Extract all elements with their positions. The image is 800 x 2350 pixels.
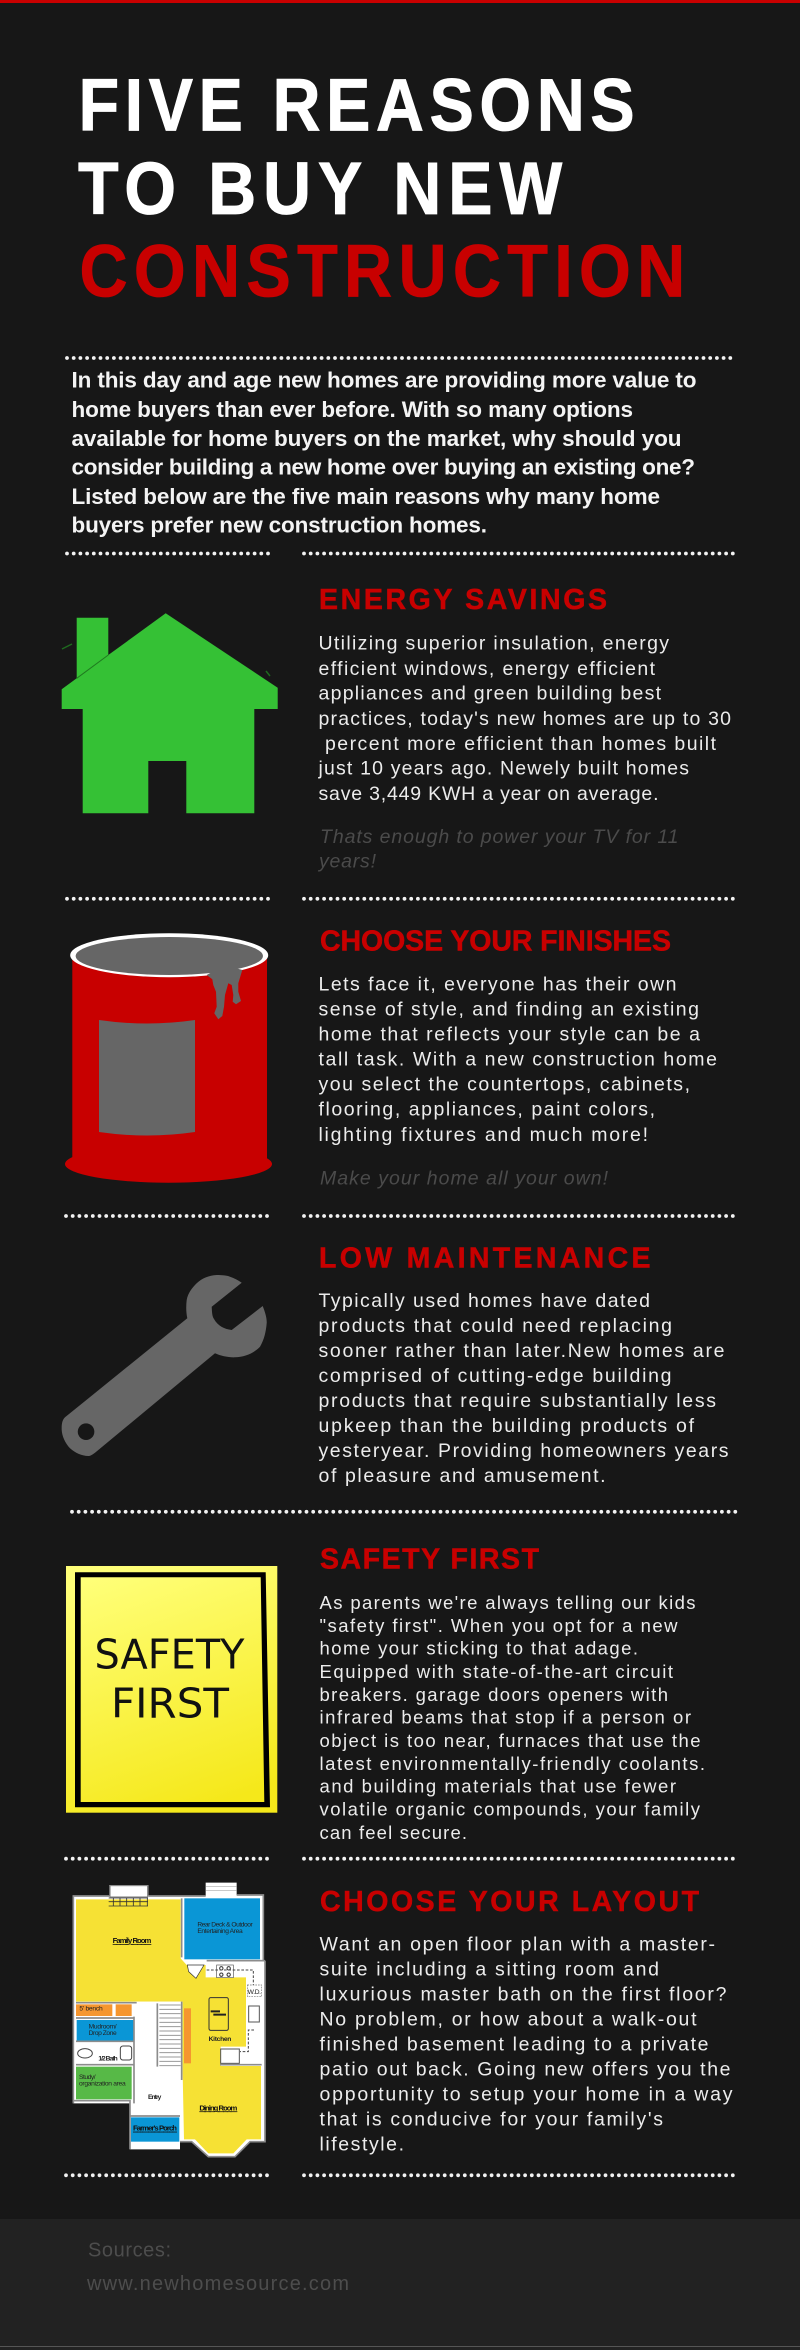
text: finishes body: home that reflects your style can be a (318, 1024, 700, 1046)
bath fixtures (78, 2049, 92, 2058)
panel: safety first (66, 1544, 705, 1843)
callout: make it your own: Make your home all your own! (320, 1168, 609, 1190)
text: safety body: object is too near, furnaces that use the (320, 1730, 700, 1751)
title (78, 63, 685, 312)
text: layout body: luxurious master bath on the first floor? (320, 1984, 727, 2006)
icon: floor plan (73, 1883, 265, 2157)
text: finishes body: sense of style, and finding an existing (318, 998, 699, 1020)
text: energy savings body: practices, today's new homes are up to 30 (318, 708, 731, 730)
text: layout body: patio out back. Going new offers you the (320, 2059, 730, 2081)
walls (73, 1895, 265, 2157)
icon: wrench (62, 1275, 267, 1456)
text: layout body: finished basement leading to a private (320, 2034, 708, 2056)
text: sources (86, 2240, 349, 2295)
icon: safety sign: FIRST (111, 1679, 230, 1727)
room labels: organization area (79, 2081, 126, 2088)
text: finishes body: flooring, appliances, paint colors, (318, 1099, 655, 1121)
room labels: 5' bench (79, 2005, 103, 2012)
text: maintenance body: upkeep than the building products of (318, 1415, 695, 1437)
text: energy savings body: percent more efficient than homes built (325, 733, 717, 755)
intro text: home buyers than ever before. With so many options (72, 397, 633, 422)
text: energy savings body (318, 633, 731, 805)
text: finishes body: tall task. With a new construction home (318, 1048, 717, 1070)
text: finishes body: Lets face it, everyone has their own (318, 974, 676, 996)
text: safety body: volatile organic compounds, your family (320, 1798, 701, 1820)
heading: low maintenance: LOW MAINTENANCE (319, 1242, 650, 1274)
intro text (72, 368, 696, 538)
text: maintenance body: of pleasure and amusement. (318, 1465, 606, 1487)
callout: TV fact: years! (317, 851, 377, 873)
callout: TV fact: Thats enough to power your TV for 11 (320, 826, 678, 848)
title: FIVE REASONS (78, 63, 635, 146)
panel: sources footer (0, 2219, 800, 2350)
icon: safety sign: SAFETY (94, 1630, 245, 1678)
text: safety body (320, 1592, 705, 1843)
panel: energy savings (62, 584, 731, 873)
text: maintenance body: products that could need replacing (318, 1315, 672, 1337)
callout: TV fact (317, 826, 678, 873)
heading: choose your layout: CHOOSE YOUR LAYOUT (320, 1886, 700, 1918)
text: safety body: Equipped with state-of-the-art circuit (320, 1661, 673, 1682)
text: safety body: breakers. garage doors openers with (320, 1684, 668, 1705)
text: finishes body: lighting fixtures and much more! (318, 1124, 648, 1146)
title: CONSTRUCTION (80, 229, 685, 312)
heading: safety first: SAFETY FIRST (320, 1544, 540, 1576)
text: safety body: infrared beams that stop if a person or (320, 1707, 691, 1728)
text: safety body: and building materials that use fewer (320, 1776, 676, 1797)
room labels: Entertaining Area (197, 1928, 243, 1935)
intro text: consider building a new home over buying an existing one? (72, 455, 695, 480)
room labels: Family Room (113, 1936, 152, 1945)
intro text: buyers prefer new construction homes. (72, 513, 487, 538)
stairs (159, 2005, 181, 2066)
room labels: Entry (148, 2094, 162, 2101)
room labels: Farmer's Porch (133, 2124, 177, 2133)
deck steps (206, 1887, 237, 1891)
panel: choose your layout (73, 1883, 733, 2157)
intro text: In this day and age new homes are providing more value to (72, 368, 696, 393)
room labels: Study/ (79, 2074, 96, 2081)
text: sources: Sources: (88, 2240, 171, 2262)
text: maintenance body: products that require substantially less (318, 1390, 716, 1412)
room labels: Rear Deck & Outdoor (197, 1921, 253, 1928)
top accent bar (0, 0, 800, 3)
text: safety body: latest environmentally-friendly coolants. (320, 1753, 705, 1774)
text: layout body: opportunity to setup your home in a way (320, 2084, 733, 2106)
text: layout body: lifestyle. (320, 2134, 404, 2156)
panel: low maintenance (62, 1242, 729, 1487)
text: sources: www.newhomesource.com (86, 2273, 349, 2295)
text: layout body: No problem, or how about a walk-out (320, 2009, 697, 2031)
text: layout body: suite including a sitting room and (320, 1959, 659, 1981)
text: layout body: Want an open floor plan with a master- (320, 1934, 715, 1956)
text: maintenance body (318, 1290, 729, 1487)
text: maintenance body: yesteryear. Providing homeowners years (318, 1440, 729, 1462)
intro text: Listed below are the five main reasons why many home (72, 484, 660, 509)
text: safety body: can feel secure. (320, 1822, 467, 1843)
room labels: 1/2 Bath (98, 2056, 118, 2063)
text: maintenance body: comprised of cutting-edge building (318, 1365, 672, 1387)
room labels: Mudroom/ (89, 2024, 117, 2031)
fireplace and hearth (110, 1886, 148, 1897)
text: layout body (320, 1934, 733, 2156)
icon: paint can (65, 933, 272, 1183)
text: layout body: that is conducive for your family's (320, 2109, 663, 2131)
kitchen fixtures (217, 1965, 233, 1978)
text: energy savings body: efficient windows, energy efficient (318, 658, 656, 680)
text: energy savings body: save 3,449 KWH a year on average. (318, 783, 658, 805)
room labels (79, 1921, 261, 2133)
heading: choose your finishes: CHOOSE YOUR FINISHES (320, 926, 671, 958)
title: TO BUY NEW (78, 147, 563, 230)
text: energy savings body: appliances and green building best (318, 683, 662, 705)
text: energy savings body: just 10 years ago. Newely built homes (318, 758, 689, 780)
text: safety body: "safety first". When you opt for a new (320, 1615, 678, 1636)
room labels: W.D. (248, 1989, 261, 1996)
text: safety body: home your sticking to that adage. (320, 1638, 638, 1659)
room labels: Kitchen (209, 2036, 231, 2043)
text: maintenance body: sooner rather than later.New homes are (318, 1340, 724, 1362)
icon: safety sign (66, 1566, 277, 1813)
room labels: Dining Room (199, 2103, 238, 2112)
intro text: available for home buyers on the market, why should you (72, 426, 682, 451)
panel: choose your finishes (65, 926, 717, 1190)
icon: green house (62, 613, 278, 813)
text: energy savings body: Utilizing superior insulation, energy (318, 633, 669, 655)
heading: energy savings: ENERGY SAVINGS (319, 584, 607, 616)
text: finishes body: you select the countertops, cabinets, (318, 1074, 690, 1096)
text: maintenance body: Typically used homes have dated (318, 1290, 650, 1312)
text: safety body: As parents we're always telling our kids (320, 1592, 696, 1613)
room labels: Drop Zone (89, 2030, 117, 2037)
text: finishes body (318, 974, 717, 1146)
